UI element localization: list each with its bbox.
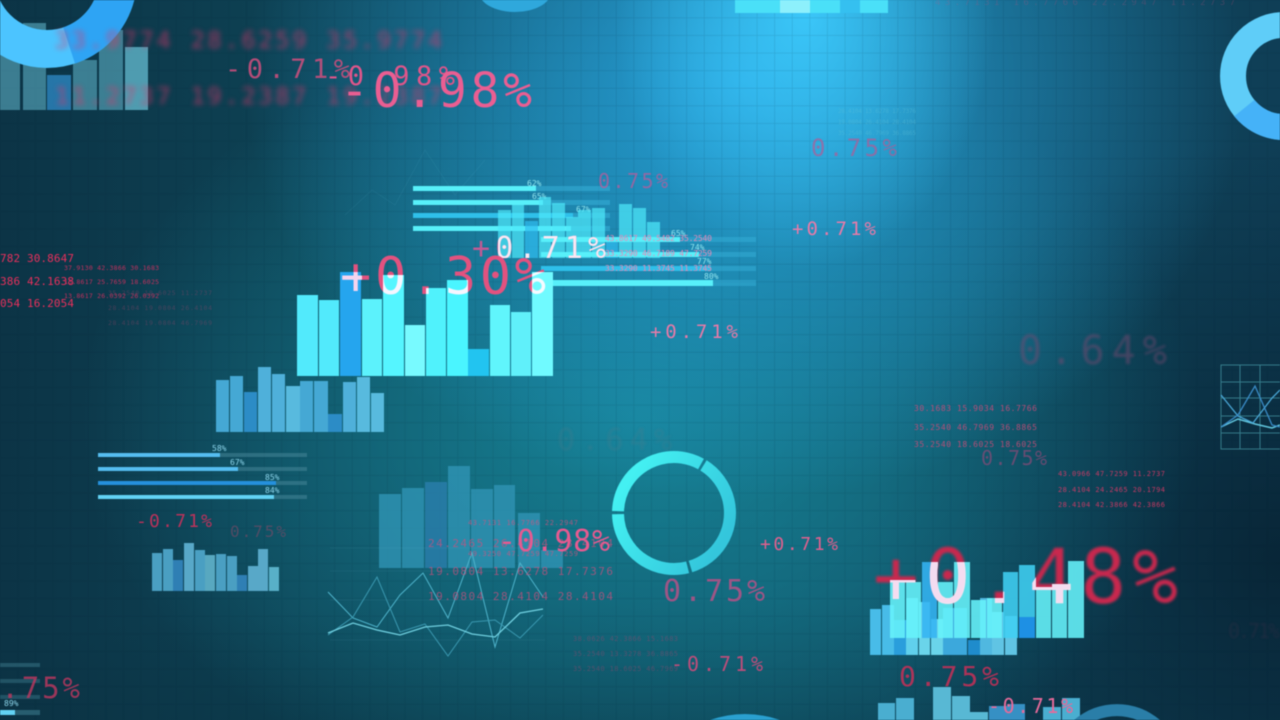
progress chart: right of centre: 77% xyxy=(697,257,712,266)
bar chart: lower right front xyxy=(890,561,1084,638)
numbers: left bright table xyxy=(0,252,74,310)
numbers: tiny top right: 35.2540 46.7969 36.8865 xyxy=(838,130,916,137)
numbers: blurred top rows: 11.2737 19.2387 19.2387 xyxy=(55,84,442,110)
numbers: upper centre table: 33.3290 46.7189 47.7259 xyxy=(605,249,712,258)
line chart: centre xyxy=(328,548,545,656)
bar chart: dim centre xyxy=(379,466,563,568)
percent label: +0.71% over bars: +0.71% xyxy=(472,231,606,266)
numbers: centre table large xyxy=(428,537,613,603)
numbers: right table one: 30.1683 15.9034 16.7766 xyxy=(914,404,1037,413)
icon: donut centre xyxy=(597,436,751,590)
percent label: -0.98% centre: -0.98% xyxy=(498,524,610,559)
numbers: blurred top rows: 33.9774 28.6259 35.9774 xyxy=(55,28,442,54)
numbers: lower centre tiny: 38.0626 42.3866 15.1683 xyxy=(573,635,678,643)
percent label: -0.71% bottom right: -0.71% xyxy=(988,694,1073,718)
numbers: left dim table: 28.4104 19.0804 26.4104 xyxy=(108,304,212,312)
percent label: -0.71% top: -0.71% xyxy=(225,54,350,85)
progress chart: upper centre: 62% xyxy=(527,179,542,188)
numbers: centre table tiny: 43.7131 16.7766 22.2947 xyxy=(468,519,578,527)
numbers: centre table tiny xyxy=(468,519,578,558)
progress chart: upper centre: 67% xyxy=(576,205,591,214)
percent label: -0.98% large: -0.98% xyxy=(340,63,532,119)
percent label: 0.64% centre dim: 0.64% xyxy=(557,423,672,458)
progress chart: upper centre: 65% xyxy=(532,192,547,201)
numbers: lower centre tiny: 35.2540 18.6025 46.7969 xyxy=(573,665,678,673)
percent label: faint far right: 0.71% xyxy=(1228,619,1280,643)
percent label: 0.75% lower centre: 0.75% xyxy=(663,574,765,609)
percent label: +0.71% over bars: +0.71% xyxy=(472,231,606,266)
bar chart: upper centre xyxy=(498,197,660,258)
percent label: +0.30% highlight over bars: +0.30% xyxy=(340,247,546,307)
progress strip: top xyxy=(735,0,888,13)
numbers: right table two: 28.4104 24.2465 20.1794 xyxy=(1058,486,1165,494)
numbers: left small table: 13.8617 26.0392 26.0392 xyxy=(64,292,159,300)
progress chart: left: 85% xyxy=(265,473,280,482)
percent label: +0.30% behind: +0.30% xyxy=(340,247,546,307)
percent label: 0.75% right: 0.75% xyxy=(981,446,1047,470)
numbers: centre table large: 19.0804 13.6278 17.7376 xyxy=(428,565,613,578)
numbers: upper centre table: 43.8617 49.5482 35.2540 xyxy=(605,234,712,243)
progress chart: left xyxy=(98,444,307,499)
numbers: left dim table: 28.4104 19.0804 46.7969 xyxy=(108,319,212,327)
icon: donut top left xyxy=(0,0,138,69)
numbers: left bright table: 054 16.2054 xyxy=(0,297,74,310)
percent label: 0.75% top right: 0.75% xyxy=(811,134,898,162)
icon: donut bottom right xyxy=(1074,704,1160,720)
numbers: tiny top right: 28.4104 13.6278 17.7376 xyxy=(838,108,916,115)
percent label: -0.71% left: -0.71% xyxy=(136,511,212,532)
bar chart: bottom right xyxy=(878,687,1080,720)
numbers: left dim table xyxy=(108,289,212,327)
bar chart: main centre left xyxy=(297,272,553,376)
progress chart: left: 67% xyxy=(230,458,245,467)
percent label: -0.98% small: -0.98% xyxy=(325,61,455,92)
numbers: tiny top right xyxy=(838,108,916,137)
numbers: right table two xyxy=(1058,470,1165,509)
progress chart: right of centre: 65% xyxy=(671,229,686,238)
line chart: faint upper xyxy=(345,150,485,215)
numbers: right table one: 35.2540 18.6025 18.6025 xyxy=(914,440,1037,449)
numbers: centre table large: 19.0804 28.4104 28.4104 xyxy=(428,590,613,603)
numbers: left bright table: 782 30.8647 xyxy=(0,252,74,265)
numbers: blurred top rows xyxy=(55,28,442,110)
percent label: +0.71% lower centre: +0.71% xyxy=(760,534,838,555)
numbers: right table one xyxy=(914,404,1037,449)
numbers: right table two: 43.0966 47.7259 11.2737 xyxy=(1058,470,1165,478)
progress chart: right of centre: 74% xyxy=(690,243,705,252)
progress chart: bottom left xyxy=(0,663,40,715)
numbers: lower centre tiny: 35.2540 13.3278 36.8865 xyxy=(573,650,678,658)
icon: donut top right xyxy=(1212,4,1280,148)
percent label: 0.75% upper centre: 0.75% xyxy=(598,169,668,193)
bar chart: small lower left xyxy=(152,543,279,591)
numbers: left small table: 13.8617 25.7659 18.6025 xyxy=(64,278,159,286)
shape: top centre circle xyxy=(479,0,551,12)
numbers: left small table: 37.9130 42.3866 30.1683 xyxy=(64,264,159,272)
progress chart: left: 58% xyxy=(212,444,227,453)
percent label: +0.71% right: +0.71% xyxy=(792,218,877,240)
numbers: lower centre tiny xyxy=(573,635,678,673)
percent label: 0.75% left dim: 0.75% xyxy=(230,522,286,541)
numbers: centre table large: 24.2465 26.4104 28.4104 xyxy=(428,537,613,550)
numbers: left dim table: 35.2540 18.6025 11.2737 xyxy=(108,289,212,297)
numbers: upper centre table: 33.3290 11.3745 11.3745 xyxy=(605,264,712,273)
percent label: +0.48% highlight over bars: +0.48% xyxy=(873,532,1178,621)
numbers: right table one: 35.2540 46.7969 36.8865 xyxy=(914,423,1037,432)
line chart: right edge xyxy=(1221,365,1280,449)
progress chart: right of centre: 80% xyxy=(704,272,719,281)
bar chart: centre left lower xyxy=(216,367,384,432)
percent label: 0.75% lower right: 0.75% xyxy=(899,660,999,693)
percent label: +0.71% centre: +0.71% xyxy=(650,321,739,343)
numbers: right table two: 28.4104 42.3866 42.3866 xyxy=(1058,501,1165,509)
percent label: -0.71% lower centre: -0.71% xyxy=(671,652,763,676)
progress chart: left: 84% xyxy=(265,486,280,495)
percent label: +0.48% large: +0.48% xyxy=(873,532,1178,621)
numbers: upper centre table xyxy=(605,234,712,273)
progress chart: bottom left: 89% xyxy=(4,699,19,708)
progress chart: right of centre xyxy=(541,229,756,286)
icon: arc bottom centre xyxy=(710,714,780,720)
numbers: tiny top right: 19.0804 26.4104 28.4104 xyxy=(838,119,916,126)
numbers: left small table xyxy=(64,264,159,300)
numbers: centre table tiny: 49.3250 47.7259 47.7259 xyxy=(468,550,578,558)
bar chart: lower right behind xyxy=(870,598,1017,655)
progress chart: upper centre xyxy=(413,179,610,231)
bar chart: top left xyxy=(0,23,148,110)
numbers: left bright table: 386 42.1638 xyxy=(0,275,74,288)
percent label: 0.64% right dim: 0.64% xyxy=(1018,328,1167,374)
